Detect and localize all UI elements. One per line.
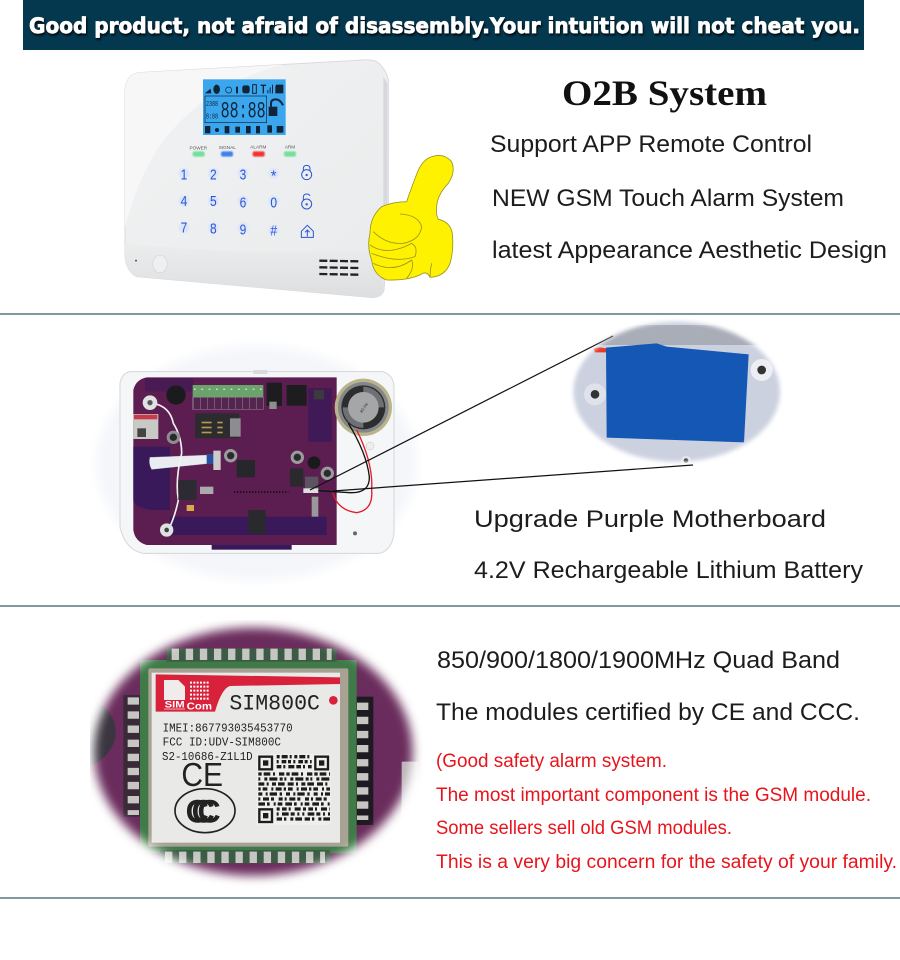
- status LEDs: ALARM: [250, 145, 266, 150]
- metal shield: [148, 668, 348, 847]
- buzzer: [166, 385, 186, 405]
- feature line 1: Support APP Remote Control: [490, 131, 812, 158]
- plastic case: [120, 372, 394, 553]
- QR code: [257, 754, 331, 825]
- device body: [125, 60, 388, 297]
- title banner: [23, 0, 864, 50]
- divider: [0, 605, 900, 607]
- keypad: [179, 165, 313, 239]
- SIMCom logo: SIM: [165, 700, 185, 710]
- dark rails and module PCB: [356, 696, 374, 825]
- status LEDs: [190, 144, 296, 157]
- device lower strip: [125, 243, 384, 297]
- terminal block: [193, 385, 263, 409]
- LCD screen: [203, 79, 286, 135]
- feature line 3: latest Appearance Aesthetic Design: [492, 237, 887, 264]
- LCD screen: 2388: [206, 101, 218, 109]
- small SIM module: [133, 414, 158, 439]
- keypad: 4: [181, 194, 187, 210]
- SIMCom logo: Com: [187, 701, 212, 712]
- module IDs: [162, 724, 292, 760]
- status LEDs: ARM: [285, 144, 295, 149]
- red warning note: [436, 751, 897, 873]
- keypad: 8: [210, 221, 217, 237]
- divider: [0, 897, 900, 899]
- spec: quad band: 850/900/1800/1900MHz Quad Band: [437, 647, 840, 674]
- chips and capacitors: [167, 370, 334, 550]
- module label: [152, 673, 340, 843]
- title banner: Good product, not afraid of disassembly.Your intuition will not cheat you.: [29, 14, 860, 38]
- keypad: 1: [181, 167, 187, 183]
- divider: [0, 313, 900, 315]
- solder pads: [133, 654, 363, 857]
- red warning note: The most important component is the GSM module.: [436, 785, 871, 806]
- pointer lines to battery: [310, 336, 693, 491]
- motherboard label: Upgrade Purple Motherboard: [474, 506, 826, 533]
- module IDs: FCC ID:UDV-SIM800C: [163, 735, 281, 749]
- battery label: 4.2V Rechargeable Lithium Battery: [474, 557, 863, 584]
- keypad: #: [270, 223, 278, 239]
- CCC mark: [175, 789, 235, 833]
- panel: purple motherboard photo: [97, 347, 417, 580]
- lithium battery: [606, 343, 749, 442]
- ribbon cable and wire: [143, 395, 221, 537]
- case glow: [97, 347, 417, 580]
- LCD screen: 88:88: [221, 98, 266, 124]
- keypad: 0: [270, 195, 277, 211]
- speaker grille: [319, 261, 358, 275]
- status LEDs: POWER: [190, 145, 208, 150]
- module IDs: S2-10686-Z1L1D: [162, 750, 253, 764]
- CCC mark: CCC: [186, 793, 221, 829]
- speaker wires: [318, 423, 372, 513]
- screw posts: [584, 359, 773, 466]
- connectors: [267, 383, 324, 409]
- keypad: 5: [210, 194, 217, 210]
- motherboard: [133, 377, 337, 545]
- icon: yellow thumbs up: [369, 155, 453, 280]
- keypad: 6: [240, 195, 246, 211]
- red warning note: (Good safety alarm system.: [436, 751, 667, 772]
- status LEDs: SIGNAL: [219, 145, 236, 150]
- SIMCom logo: [164, 680, 212, 712]
- speaker: 8Ω 2W: [359, 402, 369, 414]
- module IDs: IMEI:867793035453770: [163, 721, 293, 735]
- heading: O2B System: [562, 73, 767, 113]
- panel: alarm device: [125, 60, 453, 297]
- LCD screen: 8:88: [206, 114, 218, 122]
- keypad: 2: [210, 167, 217, 183]
- panel: SIM800C module photo: [90, 620, 430, 890]
- keypad: 7: [181, 220, 187, 236]
- speaker: [335, 379, 392, 436]
- keypad: *: [271, 169, 277, 185]
- keypad: 3: [240, 167, 246, 183]
- feature line 2: NEW GSM Touch Alarm System: [492, 185, 844, 212]
- CE mark: CE: [181, 757, 223, 794]
- red warning note: Some sellers sell old GSM modules.: [436, 818, 732, 839]
- model name: SIM800C: [229, 691, 320, 716]
- case post: [366, 442, 374, 450]
- panel: battery photo: [570, 318, 783, 466]
- spec: certification: The modules certified by CE and CCC.: [436, 699, 860, 726]
- red warning note: This is a very big concern for the safety of your family.: [436, 852, 897, 873]
- keypad: 9: [240, 223, 246, 239]
- SIM slot: [195, 413, 241, 438]
